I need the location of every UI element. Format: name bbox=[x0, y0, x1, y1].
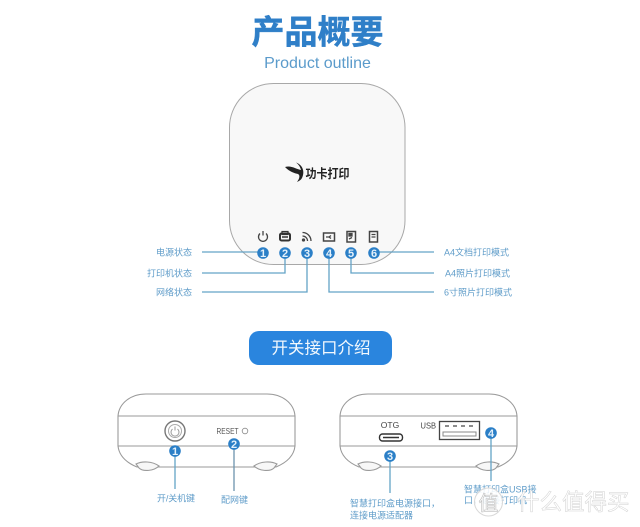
callout 3: 连接电源适配器 bbox=[350, 510, 413, 520]
icon: A4 document mode bbox=[324, 233, 334, 241]
OTG port bbox=[380, 434, 402, 441]
labels: right modes: A4照片打印模式 bbox=[445, 268, 510, 278]
brand logo bbox=[285, 162, 350, 182]
callout 3 bbox=[350, 450, 440, 520]
callout 3: 智慧打印盒电源接口， bbox=[350, 498, 440, 508]
USB label: USB bbox=[420, 420, 436, 430]
callout 4: 4 bbox=[488, 428, 495, 440]
OTG label: OTG bbox=[381, 420, 399, 430]
device body bbox=[230, 84, 405, 264]
number badges: 2 bbox=[282, 248, 288, 260]
icon: printer bbox=[280, 232, 290, 240]
watermark: 什么值得买 bbox=[517, 490, 630, 515]
panel: front view of device bbox=[230, 84, 405, 264]
reset label: RESET bbox=[216, 427, 239, 436]
icon: A4 photo mode bbox=[347, 232, 356, 242]
callout 3: 3 bbox=[387, 451, 393, 463]
number badges: 5 bbox=[348, 248, 354, 260]
brand logo: 功卡打印 bbox=[306, 166, 350, 181]
power button bbox=[165, 421, 185, 441]
callout 2: 2 bbox=[231, 439, 237, 451]
USB port bbox=[440, 422, 480, 440]
subtitle: Product outline bbox=[264, 55, 371, 72]
number badges: 3 bbox=[304, 248, 310, 260]
section button bbox=[249, 331, 392, 365]
callout 4 bbox=[464, 427, 537, 506]
callout 2 bbox=[221, 438, 248, 505]
labels: left status: 打印机状态 bbox=[147, 268, 192, 278]
icon: 6 inch photo mode bbox=[370, 232, 378, 242]
number badges bbox=[257, 247, 380, 260]
labels: left status: 电源状态 bbox=[156, 246, 192, 258]
watermark bbox=[474, 488, 630, 516]
labels: left status: 网络状态 bbox=[156, 286, 192, 298]
number badges: 6 bbox=[371, 248, 377, 260]
watermark: 值 bbox=[478, 492, 498, 515]
labels: right modes: A4文档打印模式 bbox=[444, 246, 509, 258]
reset hole bbox=[242, 428, 248, 434]
callout 4: 智慧打印盒USB接 bbox=[464, 484, 537, 494]
title: 产品概要 bbox=[252, 14, 384, 50]
leader lines bbox=[202, 252, 434, 292]
labels: left status bbox=[147, 246, 192, 298]
device outline bbox=[340, 394, 517, 470]
panel: front side of box bbox=[118, 394, 295, 505]
icon: power bbox=[258, 231, 267, 241]
number badges: 1 bbox=[260, 248, 266, 260]
labels: right modes: 6寸照片打印模式 bbox=[444, 286, 512, 298]
callout 4: 口，连接打印机 bbox=[464, 494, 527, 506]
section button: 开关接口介绍 bbox=[272, 338, 370, 358]
callout 1 bbox=[157, 445, 195, 504]
callout 1: 开/关机键 bbox=[157, 492, 195, 504]
device outline bbox=[118, 394, 295, 470]
callout 1: 1 bbox=[172, 446, 178, 458]
panel: rear side of box bbox=[340, 394, 537, 520]
number badges: 4 bbox=[326, 248, 333, 260]
labels: right modes bbox=[444, 246, 512, 298]
callout 2: 配网键 bbox=[221, 494, 248, 505]
icon: wifi bbox=[302, 232, 311, 241]
